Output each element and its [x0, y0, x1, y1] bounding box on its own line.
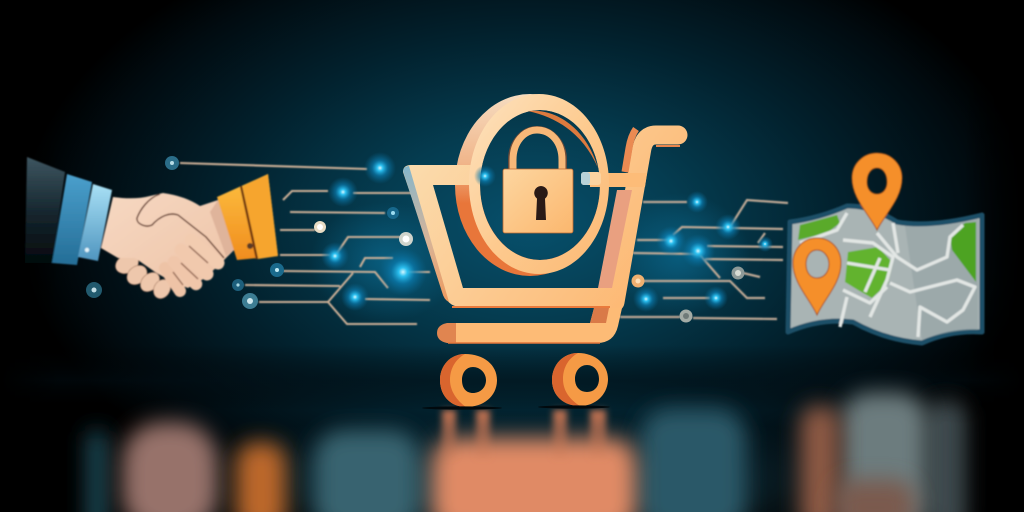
map sheet	[788, 206, 982, 343]
reflection: left teal glow	[314, 400, 420, 505]
orange cuff button	[247, 243, 253, 249]
circuit nodes: right	[632, 191, 773, 322]
reflection: orange cuff	[236, 412, 286, 505]
map pin: left	[793, 238, 841, 315]
orange cuff	[217, 174, 278, 260]
base connector front	[590, 308, 609, 323]
basket rim right	[590, 173, 647, 187]
rim stub cap	[581, 172, 590, 185]
green park: centre	[845, 247, 893, 298]
right wheel side	[552, 353, 580, 406]
reflection: map middle	[840, 362, 928, 505]
icon: shopping cart	[403, 94, 680, 407]
left wheel	[440, 354, 497, 407]
glow in ring	[474, 165, 496, 187]
rim stub in ring	[581, 172, 601, 185]
base bar end	[437, 323, 456, 343]
ring inner shading	[528, 111, 598, 168]
icon: folded map	[788, 153, 982, 343]
left rail shade	[403, 166, 449, 302]
reflection: left teal streak	[88, 400, 106, 505]
light cuff	[78, 184, 112, 261]
basket frame	[403, 165, 616, 307]
base bar	[447, 308, 622, 343]
circuit nodes: left	[86, 152, 427, 311]
reflection: handshake	[122, 392, 218, 505]
map roads	[800, 213, 975, 337]
padlock body	[503, 169, 573, 233]
left wheel side	[440, 354, 466, 407]
padlock shackle	[513, 130, 562, 170]
padlock	[503, 128, 573, 233]
padlock shackle shadow	[510, 128, 565, 170]
orange cuff right band	[243, 174, 278, 259]
icon: handshake	[25, 157, 278, 302]
ring extrusion	[455, 94, 605, 276]
ring front	[469, 94, 609, 274]
reflection: map pin	[800, 375, 840, 505]
map pin: top	[852, 153, 902, 230]
floor reflection	[88, 362, 967, 505]
green park: right	[950, 222, 976, 282]
base bar shadow	[448, 342, 600, 344]
keyhole	[534, 186, 548, 220]
blue cuff	[52, 174, 92, 265]
wrist shadow	[210, 200, 234, 256]
reflection: right teal glow	[640, 378, 746, 505]
wheel contact shadow	[422, 405, 610, 410]
dark sleeve	[25, 157, 65, 263]
handle and right rail	[615, 135, 678, 302]
map shade	[905, 219, 978, 340]
finger creases	[173, 246, 208, 285]
circuit lines: left	[180, 163, 430, 324]
blue haze behind circuit lines	[310, 193, 750, 322]
reflection: map lower tint	[835, 450, 915, 505]
bottom rail shade	[452, 306, 610, 308]
right hand fingers	[165, 240, 218, 291]
handle underside shade	[656, 145, 680, 147]
right wheel	[552, 353, 608, 406]
reflection: cart wheels	[442, 410, 606, 458]
circuit lines: right	[620, 200, 788, 319]
reflection: map right	[925, 370, 967, 505]
cuff button	[85, 248, 89, 252]
right hand index edge	[137, 194, 224, 258]
reflection: cart body	[432, 408, 636, 505]
left hand fingers	[112, 251, 174, 302]
right basket rail shade	[598, 190, 632, 288]
handle shade	[625, 129, 636, 172]
green park: top left	[798, 215, 840, 240]
clasped hands	[101, 193, 234, 288]
orange cuff seam	[241, 186, 257, 259]
